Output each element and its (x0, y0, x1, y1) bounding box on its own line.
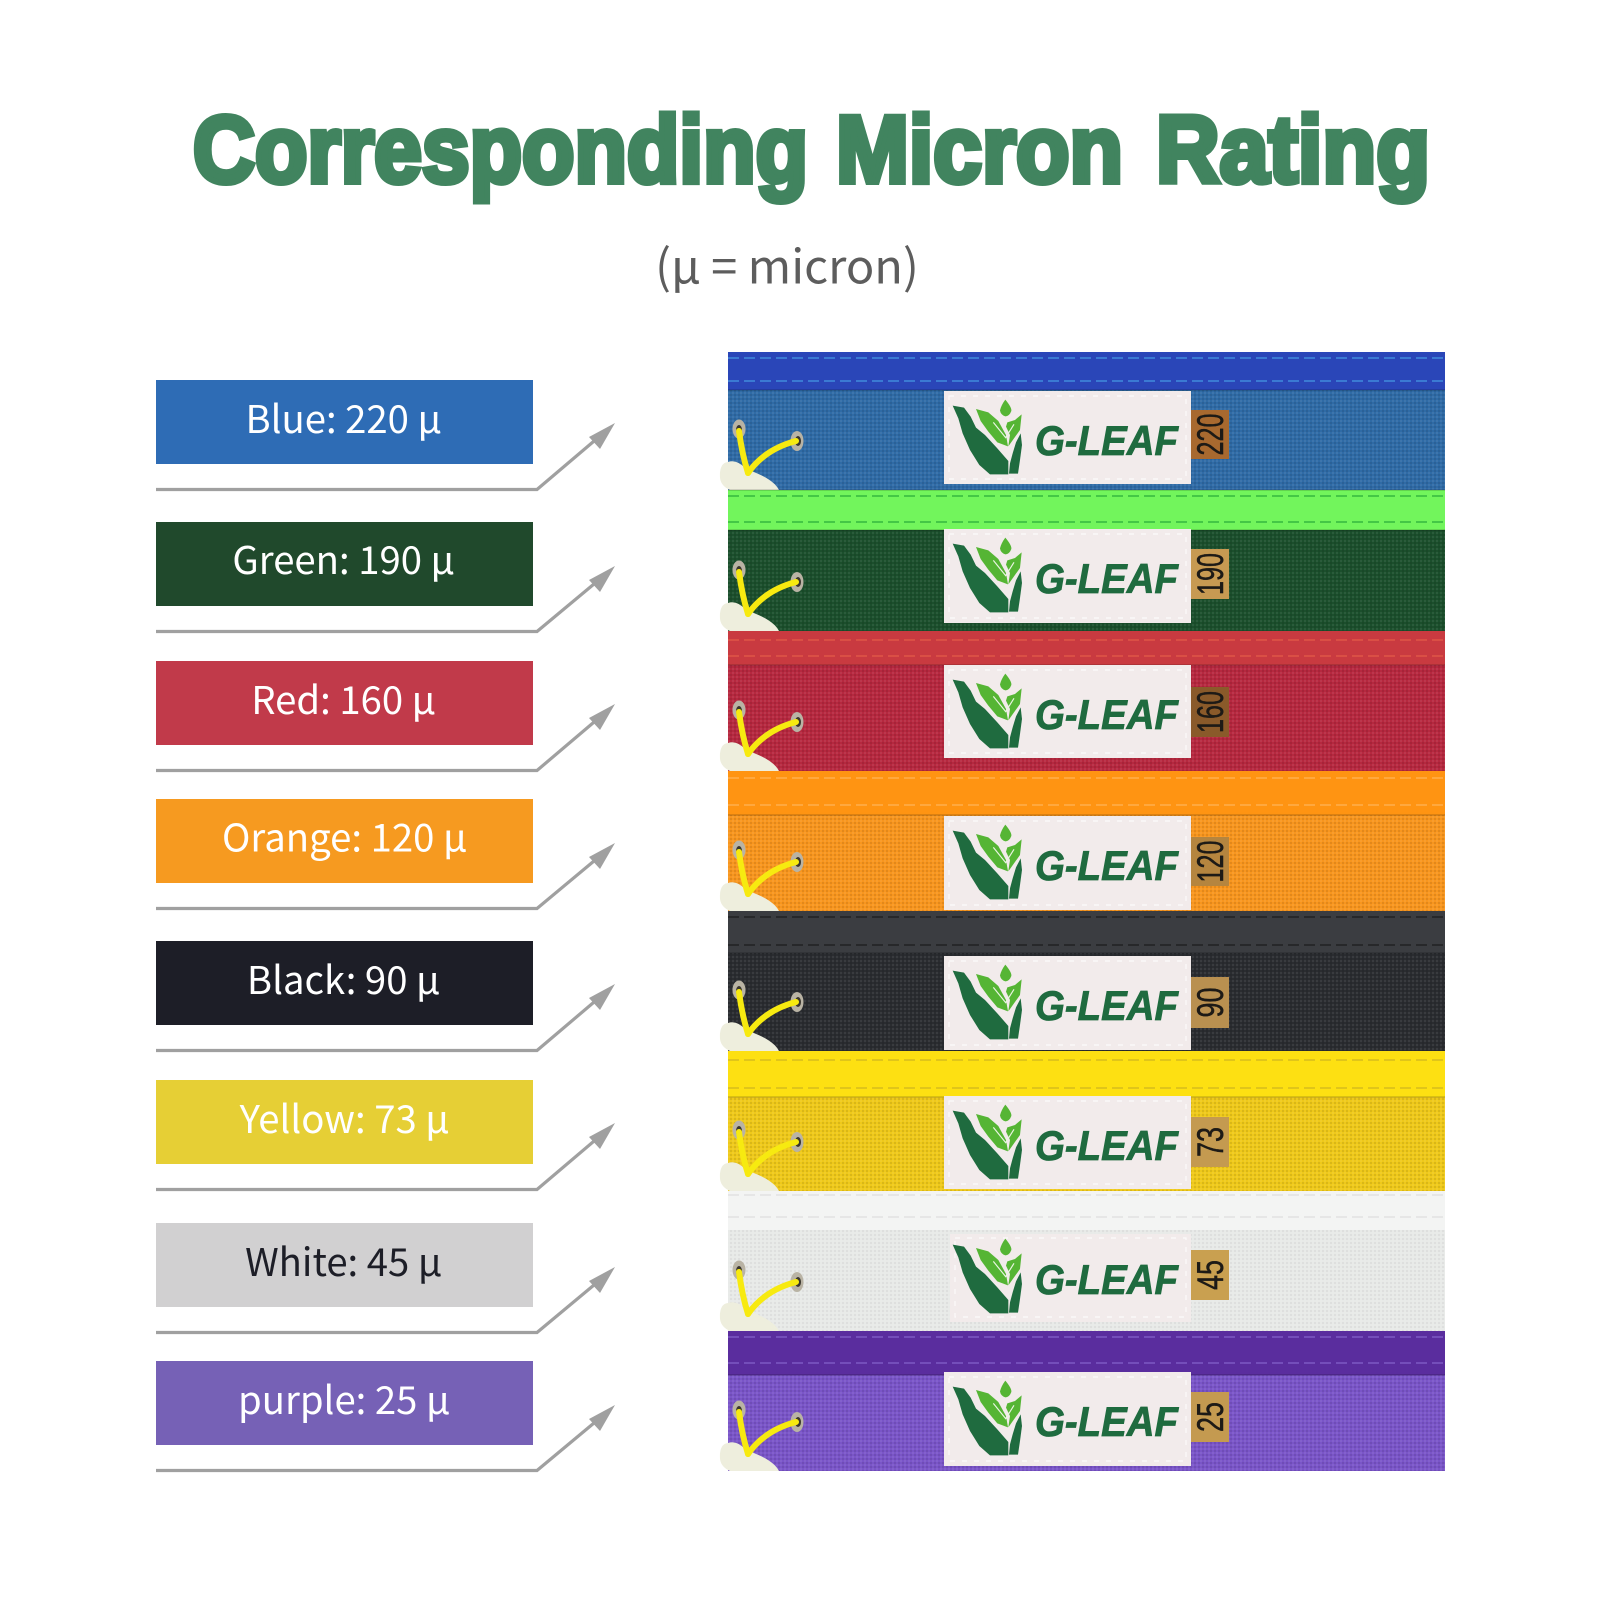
bag: purple 25: 25 (1190, 1402, 1231, 1432)
legend: yellow (156, 1080, 615, 1190)
bag: yellow 73 (720, 1051, 1445, 1191)
legend: blue (156, 380, 615, 490)
legend: purple (156, 1361, 615, 1470)
bag: blue 220 (720, 352, 1445, 490)
legend: blue: Blue: 220 μ (245, 390, 442, 445)
legend: black (156, 941, 615, 1050)
bag: red 160: 160 (1190, 691, 1231, 733)
bag: yellow 73: 73 (1190, 1127, 1231, 1157)
bag: green 190 (720, 490, 1445, 631)
bag: white 45: 45 (1190, 1260, 1231, 1290)
bag: red 160: G-LEAF (1035, 691, 1179, 738)
legend: purple: purple: 25 μ (238, 1371, 450, 1426)
title: Corresponding (193, 97, 808, 203)
bag: black 90: G-LEAF (1035, 982, 1179, 1029)
subtitle: (μ = micron) (655, 228, 919, 298)
legend: orange: Orange: 120 μ (222, 808, 467, 864)
title: Micron (836, 97, 1123, 203)
bag: black 90: 90 (1190, 988, 1231, 1018)
bag: red 160 (720, 631, 1445, 771)
legend: green: Green: 190 μ (232, 531, 455, 586)
bag: green 190: 190 (1190, 553, 1231, 595)
title: Rating (1156, 97, 1430, 203)
bag: blue 220: G-LEAF (1035, 417, 1179, 464)
bag: green 190: G-LEAF (1035, 555, 1179, 602)
legend: white (156, 1223, 615, 1332)
bag: orange 120: 120 (1190, 840, 1231, 882)
title (193, 97, 1430, 203)
bag: orange 120: G-LEAF (1035, 842, 1179, 889)
legend: red (156, 661, 615, 770)
bag: yellow 73: G-LEAF (1035, 1122, 1179, 1169)
legend: orange (156, 799, 615, 908)
bag: black 90 (720, 911, 1445, 1051)
bag: purple 25: G-LEAF (1035, 1398, 1179, 1445)
bag: white 45 (720, 1191, 1445, 1331)
legend: yellow: Yellow: 73 μ (239, 1090, 449, 1145)
legend: black: Black: 90 μ (247, 951, 440, 1006)
bag: white 45: G-LEAF (1035, 1256, 1179, 1303)
legend: red: Red: 160 μ (251, 671, 436, 726)
bag: purple 25 (720, 1331, 1445, 1471)
bag: blue 220: 220 (1190, 414, 1231, 456)
legend: white: White: 45 μ (245, 1233, 442, 1288)
bag: orange 120 (720, 771, 1445, 911)
legend: green (156, 522, 615, 632)
